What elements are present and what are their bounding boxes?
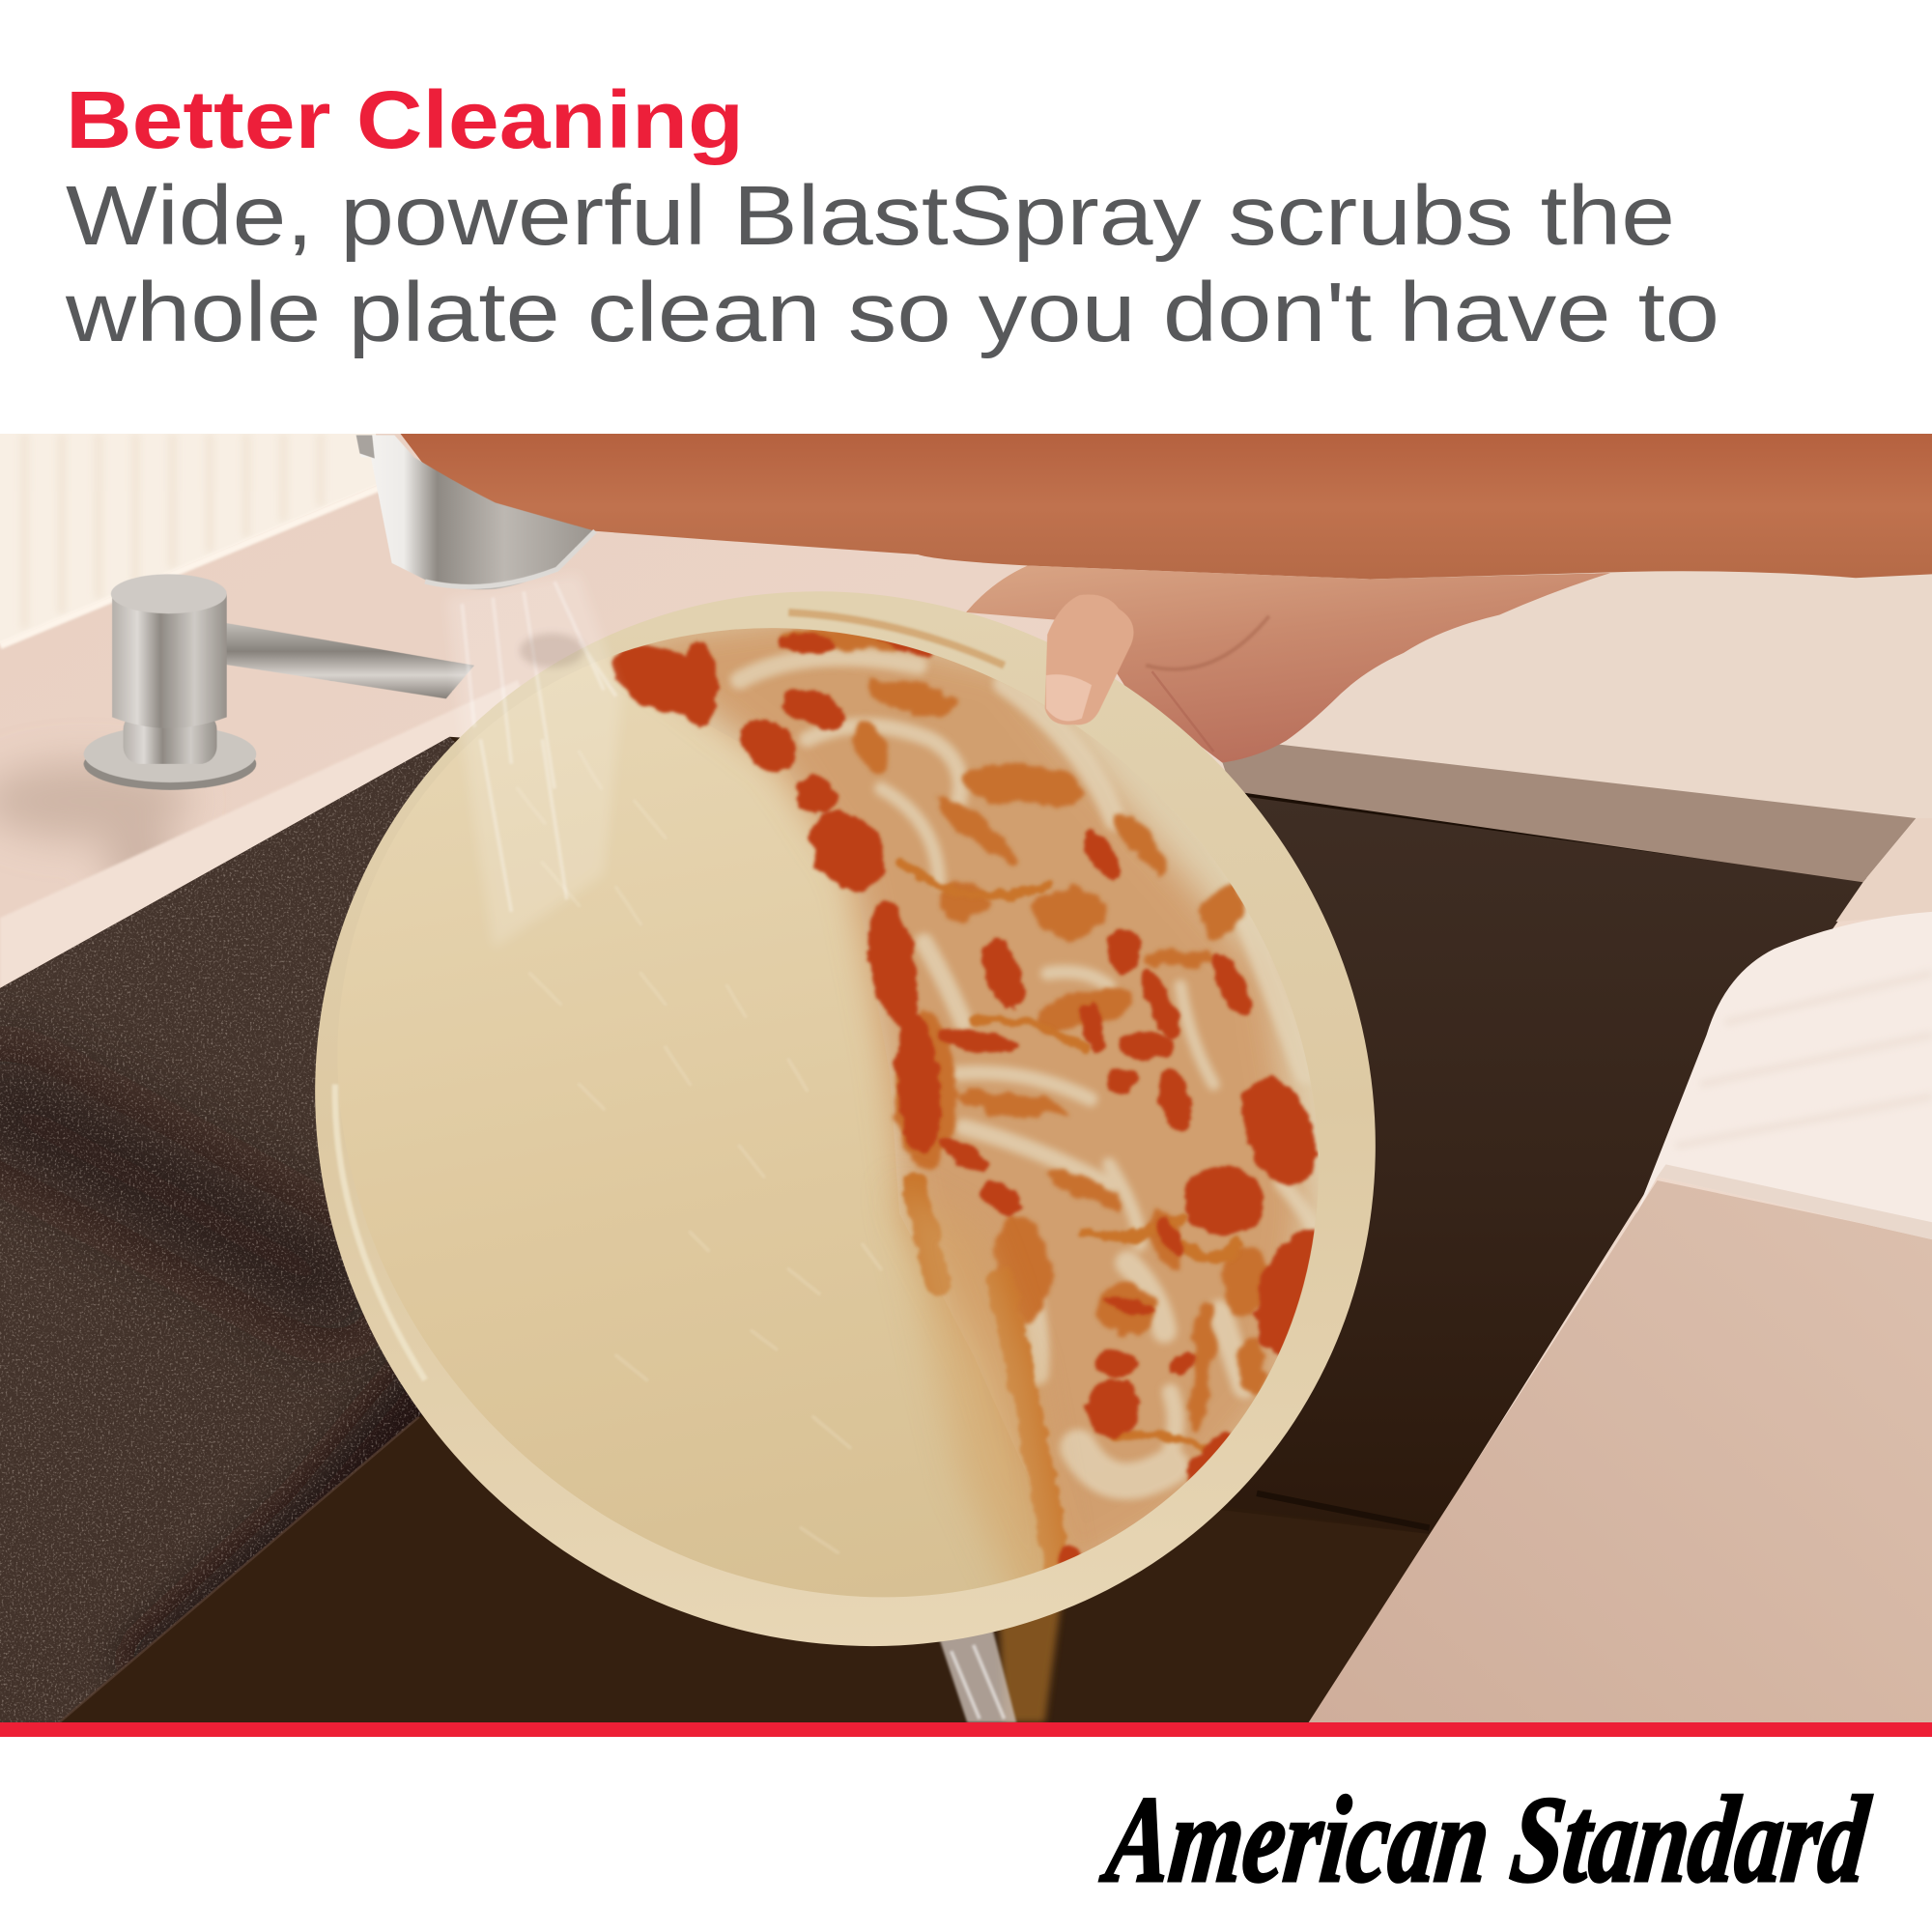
sink back wall xyxy=(1248,797,1862,1320)
plate xyxy=(98,373,1593,1864)
floor to wall seam xyxy=(59,1417,419,1722)
title: Better Cleaning: Better Cleaning xyxy=(66,74,744,165)
upper right counter xyxy=(1213,542,1932,863)
clean surface xyxy=(296,579,1405,1663)
counter stain patches xyxy=(0,761,191,894)
counter rear edge highlight xyxy=(0,486,384,645)
thumb over plate rim xyxy=(1045,594,1134,724)
hand gripping plate xyxy=(966,565,1610,763)
water spray xyxy=(446,573,622,949)
red divider band xyxy=(0,1722,1932,1737)
dispenser base top xyxy=(84,725,256,782)
sink interior xyxy=(0,737,1866,1722)
plate outer rim xyxy=(98,373,1593,1864)
dispenser base xyxy=(84,738,256,790)
dirty side base xyxy=(579,542,1430,1651)
clean area water sheen xyxy=(518,752,881,1552)
red sauce blobs xyxy=(604,622,1351,1580)
dispenser cap xyxy=(111,574,227,613)
sink left wall xyxy=(0,736,455,1722)
sink back wall top line xyxy=(1237,793,1866,880)
right counter top xyxy=(1309,1180,1932,1722)
sink floor xyxy=(59,1417,1430,1722)
thumbnail xyxy=(1046,674,1092,721)
dispenser body xyxy=(112,594,227,728)
orange run down the edge xyxy=(899,863,1238,1584)
counter back lip on far side xyxy=(1213,737,1916,882)
subtitle line 1: Wide, powerful BlastSpray scrubs the xyxy=(66,169,1675,263)
right counter corner xyxy=(1835,818,1917,922)
photo: plate being sprayed over a kitchen sink xyxy=(0,434,1932,1722)
plate left rim highlight xyxy=(335,1084,425,1380)
sprayer head xyxy=(356,435,595,589)
broad sauce wash xyxy=(616,616,1306,1589)
arm xyxy=(401,434,1932,579)
plate inner surface xyxy=(296,542,1430,1663)
heading text block xyxy=(65,74,1719,359)
backsplash xyxy=(0,434,382,643)
pale scraped-clean swirls xyxy=(739,657,1316,1481)
rinse-edge translucent wash xyxy=(892,1182,1069,1616)
dispenser spout xyxy=(207,620,474,698)
dispenser neck xyxy=(124,712,216,764)
water running off plate xyxy=(935,1577,1065,1722)
orange smears xyxy=(781,629,1269,1435)
towel xyxy=(1636,912,1932,1239)
subtitle line 2: whole plate clean so you don't have to xyxy=(65,266,1719,359)
sauce staining on upper rim xyxy=(788,612,1005,666)
countertop xyxy=(0,434,1884,1486)
sink floor seam xyxy=(1257,1493,1430,1528)
soap dispenser xyxy=(84,574,474,790)
sink front lip on left xyxy=(0,680,529,988)
